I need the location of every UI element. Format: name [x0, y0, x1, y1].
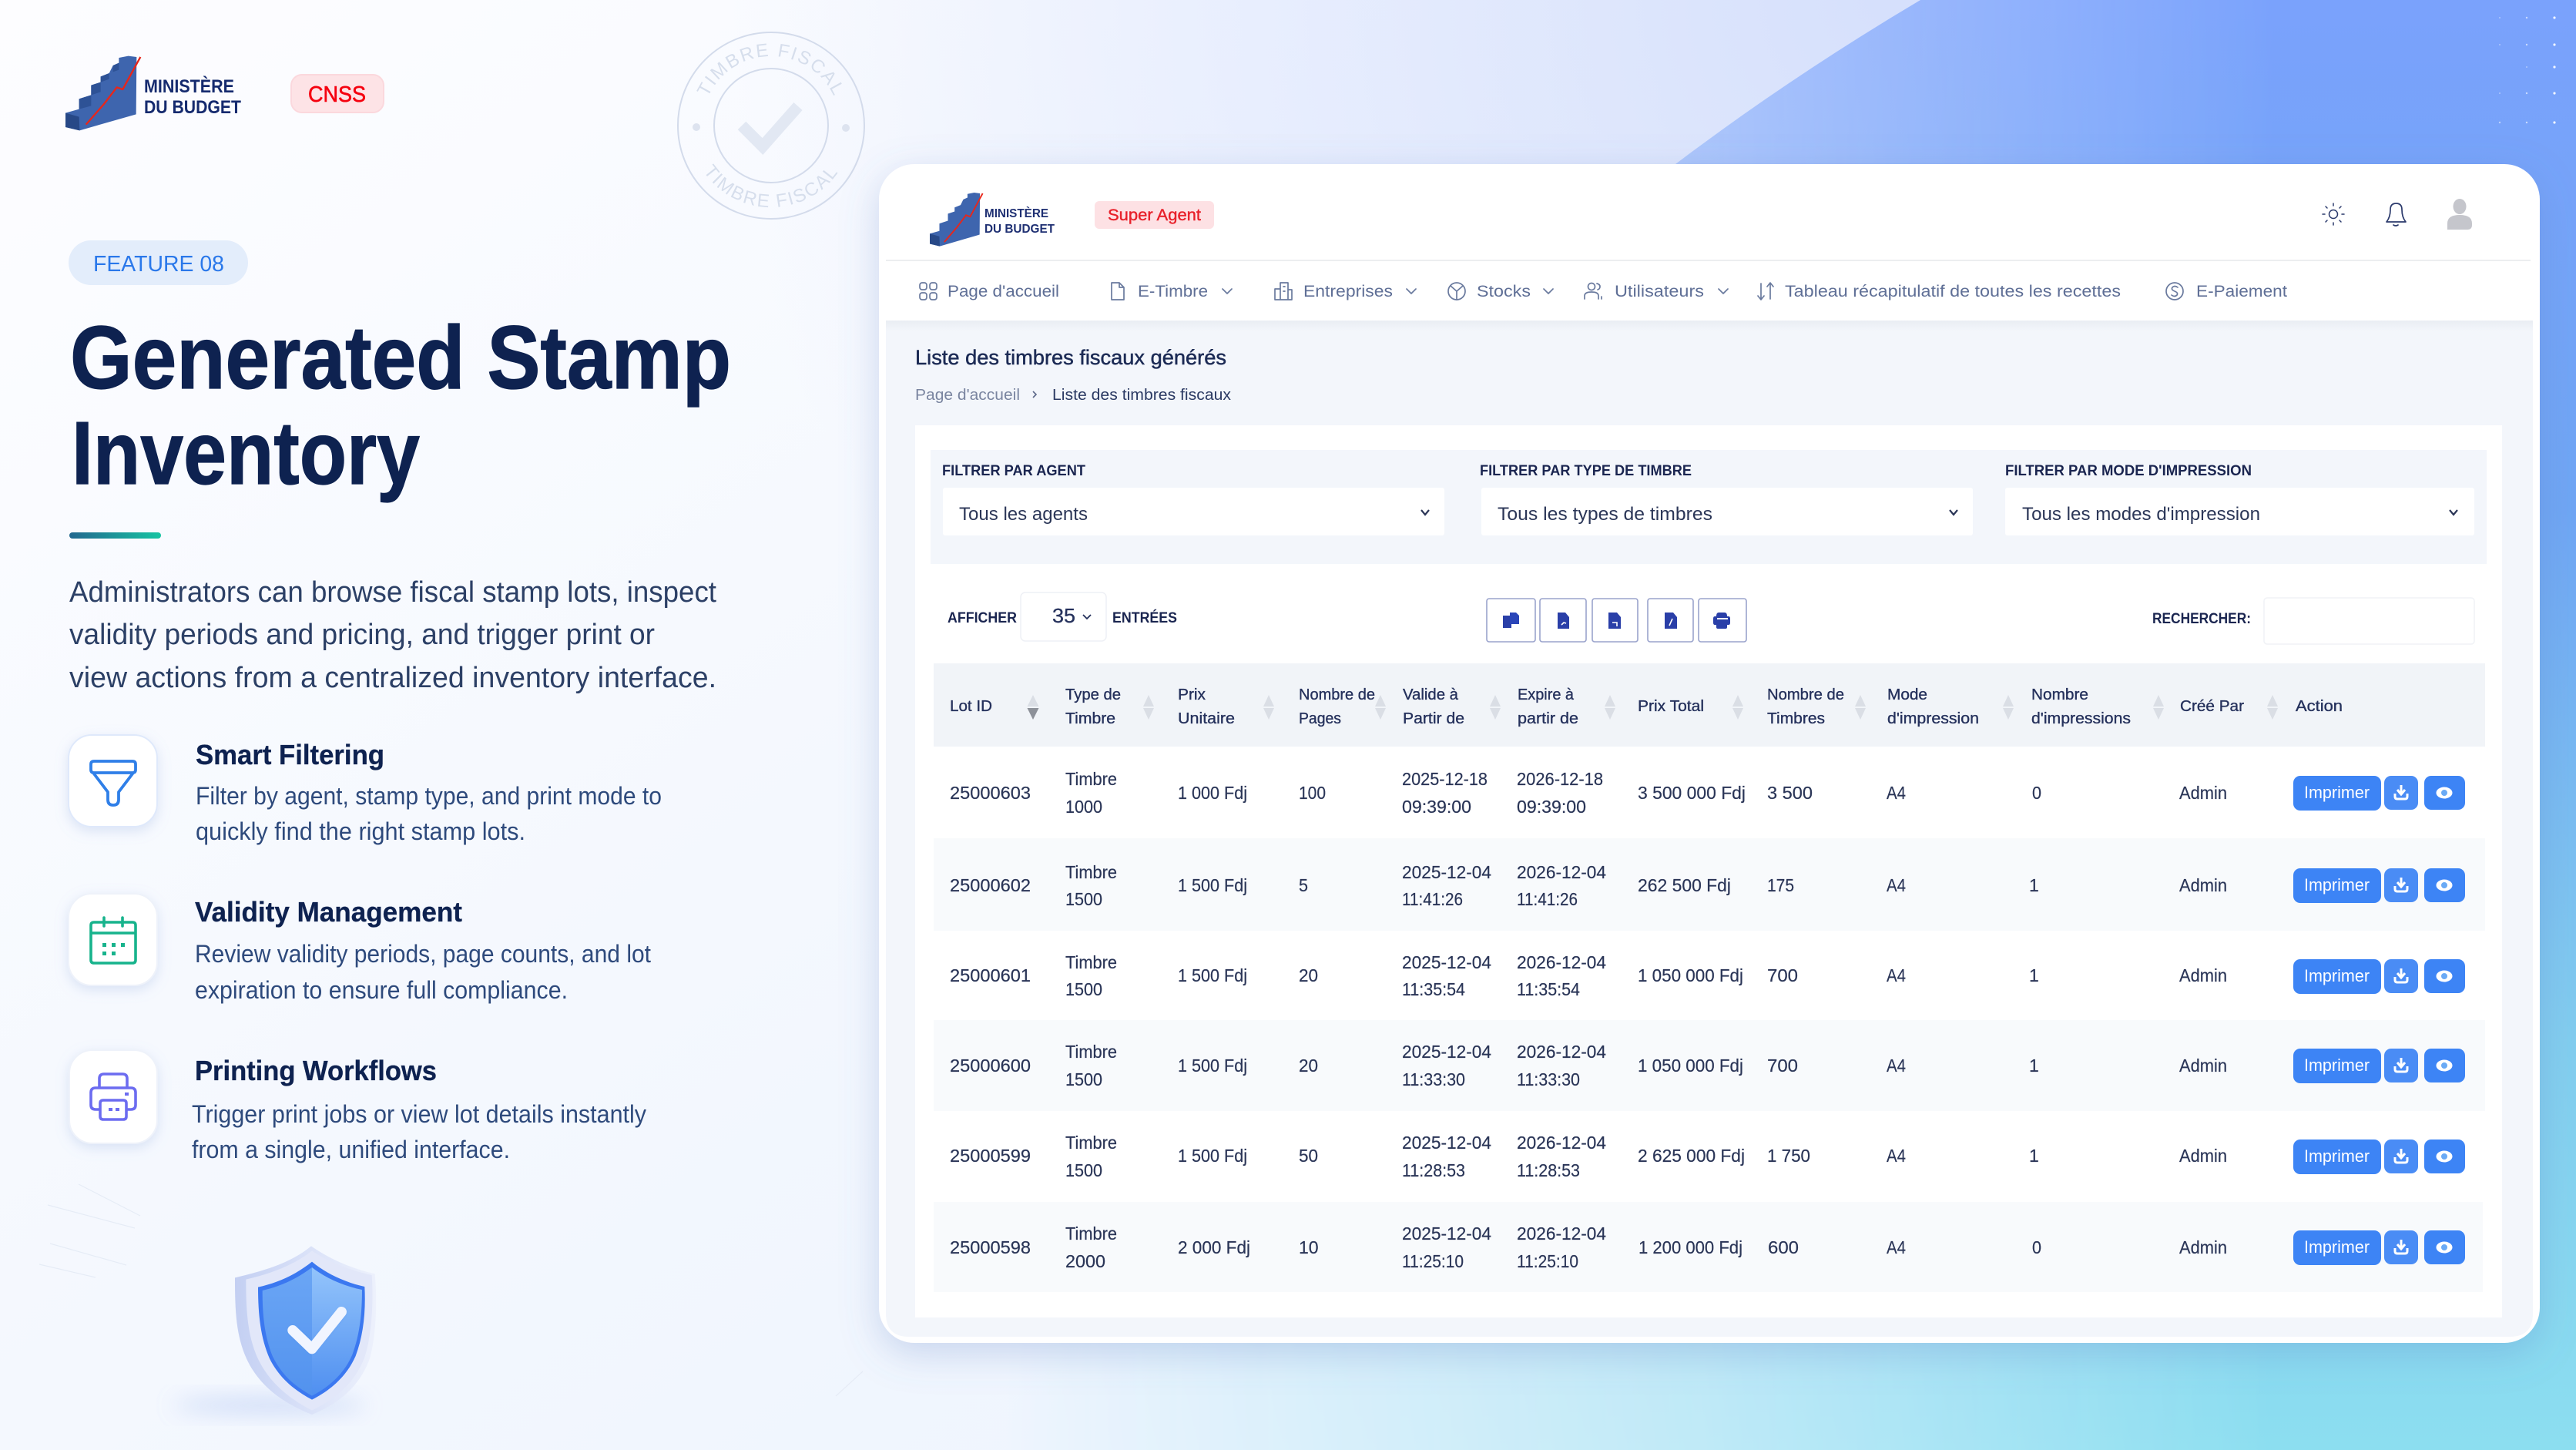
feature: validity management: expiration to ensure full compliance.	[195, 976, 568, 1004]
table row: lot 25000603: 1000	[1065, 797, 1102, 817]
table row: lot 25000603: 0	[2032, 783, 2041, 803]
table row: lot 25000603	[950, 769, 2465, 817]
navigation bar: Utilisateurs	[1615, 283, 1704, 300]
table row: lot 25000602: 2026-12-04	[1517, 862, 1606, 882]
feature: validity management	[69, 894, 651, 1004]
table row: lot 25000601: Timbre	[1065, 952, 1117, 972]
table row: lot 25000603: 2026-12-18	[1517, 769, 1603, 789]
table row: lot 25000603: 3 500	[1767, 783, 1813, 803]
table row: lot 25000603: 3 500 000 Fdj	[1638, 783, 1746, 803]
table row: lot 25000600: 11:33:30	[1402, 1069, 1465, 1089]
feature: smart filtering	[69, 735, 662, 845]
table row: lot 25000602: 5	[1299, 875, 1308, 895]
pill: feature 08	[69, 240, 248, 285]
table row: lot 25000602: 1	[2029, 875, 2039, 895]
table row: lot 25000598: 2 000 Fdj	[1178, 1237, 1250, 1257]
table controls: entries, export, search: RECHERCHER:	[2152, 611, 2251, 627]
table row: lot 25000602: 1 500 Fdj	[1178, 875, 1247, 895]
table header: Nombre de	[1767, 686, 1844, 703]
table row: lot 25000600: 1 500 Fdj	[1178, 1056, 1247, 1076]
table header: Nombre de	[1299, 686, 1375, 703]
table row: lot 25000602: Admin	[2179, 875, 2227, 895]
table row: lot 25000601: 2025-12-04	[1402, 952, 1491, 972]
table controls: entries, export, search: ENTRÉES	[1112, 609, 1177, 626]
table row: lot 25000599: Timbre	[1065, 1133, 1117, 1153]
table row: lot 25000599: 11:28:53	[1402, 1160, 1465, 1180]
table row: lot 25000599: Admin	[2179, 1146, 2227, 1166]
table row: lot 25000598: Timbre	[1065, 1223, 1117, 1244]
table row: lot 25000600: A4	[1887, 1056, 1906, 1076]
table row: lot 25000601: 700	[1767, 965, 1798, 985]
table row: lot 25000601: 20	[1299, 965, 1318, 985]
table row: lot 25000601: 1	[2029, 965, 2039, 985]
table row: lot 25000603: Timbre	[1065, 769, 1117, 789]
page heading and breadcrumb: Page d'accueil	[915, 387, 1020, 404]
page heading and breadcrumb	[915, 346, 1231, 404]
table row: lot 25000598: 11:25:10	[1402, 1251, 1464, 1271]
table row: lot 25000599: 11:28:53	[1517, 1160, 1580, 1180]
filter bar: Tous les modes d'impression	[2022, 504, 2260, 525]
navigation bar: E-Paiement	[2196, 283, 2287, 300]
table row: lot 25000602	[934, 838, 2485, 931]
row actions	[2293, 776, 2465, 811]
icon: notification bell	[2386, 203, 2406, 226]
table header: Type de	[1065, 686, 1121, 703]
table row: lot 25000602: 11:41:26	[1402, 889, 1463, 909]
row actions	[2293, 1140, 2465, 1174]
table row: lot 25000601: 1 050 000 Fdj	[1638, 965, 1743, 985]
table row: lot 25000599: 50	[1299, 1146, 1318, 1166]
table row: lot 25000599: 1500	[1065, 1160, 1102, 1180]
row actions: Imprimer	[2304, 1056, 2370, 1075]
table row: lot 25000603: 09:39:00	[1517, 797, 1586, 817]
table row: lot 25000599: 2025-12-04	[1402, 1133, 1491, 1153]
table row: lot 25000598: 25000598	[950, 1237, 1031, 1257]
table row: lot 25000601: 2026-12-04	[1517, 952, 1606, 972]
table header: Prix	[1178, 686, 1206, 703]
table header: Expire à	[1518, 686, 1575, 703]
icon: theme sun	[2323, 203, 2344, 225]
row actions: Imprimer	[2304, 966, 2370, 985]
table controls: entries, export, search	[948, 592, 2474, 644]
navigation bar: Page d'accueil	[948, 283, 1059, 300]
feature: validity management: Validity Management	[195, 896, 462, 928]
logo: Ministère du Budget: MINISTÈRE	[144, 76, 234, 97]
logo: Ministère du Budget: DU BUDGET	[144, 97, 241, 118]
table row: lot 25000599: 1 750	[1767, 1146, 1810, 1166]
icon: calendar	[69, 894, 157, 985]
navigation bar: Tableau récapitulatif de toutes les recettes	[1785, 283, 2121, 300]
table row: lot 25000598: 2026-12-04	[1517, 1223, 1606, 1244]
table row: lot 25000598: 1 200 000 Fdj	[1639, 1237, 1742, 1257]
table row: lot 25000600: 2026-12-04	[1517, 1042, 1606, 1062]
row actions: Imprimer	[2304, 1237, 2370, 1257]
table controls: entries, export, search: AFFICHER	[948, 610, 1017, 626]
table row: lot 25000601: 11:35:54	[1402, 979, 1465, 999]
table row: lot 25000598: 2025-12-04	[1402, 1223, 1491, 1244]
feature: smart filtering: Filter by agent, stamp type, and print mode to	[196, 782, 662, 810]
table row: lot 25000602: Timbre	[1065, 862, 1117, 882]
table row: lot 25000603: 2025-12-18	[1402, 769, 1488, 789]
table row: lot 25000600: 1 050 000 Fdj	[1638, 1056, 1743, 1076]
table row: lot 25000603: A4	[1887, 783, 1906, 803]
table row: lot 25000601: 11:35:54	[1517, 979, 1580, 999]
table row: lot 25000599: 1	[2029, 1146, 2039, 1166]
table header: Timbre	[1065, 710, 1115, 727]
feature: printing workflows	[69, 1050, 646, 1163]
page heading and breadcrumb: Liste des timbres fiscaux	[1052, 387, 1231, 404]
table row: lot 25000603: 100	[1299, 783, 1326, 803]
navigation bar: E-Timbre	[1138, 283, 1208, 300]
table row: lot 25000598: 10	[1299, 1237, 1319, 1257]
table row: lot 25000598	[934, 1202, 2483, 1292]
feature: smart filtering: Smart Filtering	[196, 739, 384, 770]
navigation bar	[920, 283, 2287, 300]
watermark: timbre fiscal stamp: TIMBRE FISCAL	[696, 43, 842, 96]
table row: lot 25000599: A4	[1887, 1146, 1906, 1166]
filter bar: Tous les agents	[959, 504, 1088, 525]
table row: lot 25000600: 1	[2029, 1056, 2039, 1076]
filter bar: FILTRER PAR AGENT	[942, 463, 1085, 479]
feature: validity management: Review validity periods, page counts, and lot	[195, 940, 651, 968]
table row: lot 25000601: 25000601	[950, 965, 1031, 985]
icon: printer	[69, 1050, 157, 1143]
table row: lot 25000600: 1500	[1065, 1069, 1102, 1089]
table row: lot 25000600: 20	[1299, 1056, 1318, 1076]
header: logo and role badge: MINISTÈRE	[984, 206, 1048, 220]
table header: Lot ID	[950, 698, 992, 715]
table row: lot 25000603: 09:39:00	[1402, 797, 1471, 817]
feature: printing workflows: Printing Workflows	[195, 1055, 437, 1086]
table header: d'impression	[1887, 710, 1979, 727]
header: logo and role badge: DU BUDGET	[984, 223, 1055, 236]
table row: lot 25000599: 1 500 Fdj	[1178, 1146, 1247, 1166]
table row: lot 25000601	[950, 952, 2465, 999]
table row: lot 25000600: Admin	[2179, 1056, 2227, 1076]
icon: user avatar	[2447, 199, 2472, 230]
table row: lot 25000601: A4	[1887, 965, 1906, 985]
row actions	[2293, 868, 2465, 903]
table row: lot 25000603: 25000603	[950, 783, 1031, 803]
table header: Valide à	[1403, 686, 1459, 703]
filter bar: FILTRER PAR TYPE DE TIMBRE	[1480, 463, 1692, 479]
table row: lot 25000603: 1 000 Fdj	[1178, 783, 1247, 803]
table row: lot 25000600: 2025-12-04	[1402, 1042, 1491, 1062]
table row: lot 25000601: Admin	[2179, 965, 2227, 985]
filter bar: Tous les types de timbres	[1498, 504, 1712, 525]
icon: funnel	[69, 735, 157, 827]
table header	[934, 663, 2485, 747]
table controls: entries, export, search: 35	[1052, 604, 1075, 627]
table row: lot 25000598: 0	[2032, 1237, 2041, 1257]
feature: printing workflows: from a single, unified interface.	[192, 1136, 510, 1163]
table row: lot 25000600: 25000600	[950, 1056, 1031, 1076]
navigation bar: Stocks	[1477, 283, 1531, 300]
table row: lot 25000598: A4	[1887, 1237, 1906, 1257]
row actions	[2293, 959, 2465, 994]
table row: lot 25000599: 25000599	[950, 1146, 1031, 1166]
row actions	[2293, 1230, 2465, 1265]
table header: Action	[2296, 698, 2343, 715]
title	[70, 307, 731, 503]
row actions	[2293, 1049, 2465, 1083]
header: logo and role badge	[930, 193, 1214, 247]
table row: lot 25000603: Admin	[2179, 783, 2227, 803]
table header: partir de	[1518, 710, 1578, 727]
badge: CNSS: CNSS	[308, 82, 366, 107]
intro paragraph	[69, 576, 716, 694]
table header: Unitaire	[1178, 710, 1235, 727]
logo: Ministère du Budget	[65, 56, 241, 130]
intro paragraph: validity periods and pricing, and trigger print or	[69, 619, 655, 651]
pill: feature 08: FEATURE 08	[93, 252, 224, 277]
table header: Prix Total	[1638, 698, 1704, 715]
feature: printing workflows: Trigger print jobs or view lot details instantly	[192, 1100, 646, 1128]
icon: 3d shield with check	[173, 1246, 376, 1415]
navigation bar: Entreprises	[1303, 283, 1393, 300]
table row: lot 25000600	[934, 1020, 2485, 1111]
row actions: Imprimer	[2304, 1146, 2370, 1166]
header: logo and role badge: Super Agent	[1108, 206, 1201, 224]
page heading and breadcrumb: Liste des timbres fiscaux générés	[915, 346, 1226, 369]
panel: application window	[879, 164, 2540, 1343]
table row: lot 25000598: 2000	[1065, 1251, 1105, 1271]
table header: Timbres	[1767, 710, 1825, 727]
table row: lot 25000602: A4	[1887, 875, 1906, 895]
badge: CNSS	[291, 75, 384, 112]
table row: lot 25000602: 175	[1767, 875, 1794, 895]
table row: lot 25000602: 262 500 Fdj	[1638, 875, 1731, 895]
table header: Nombre	[2031, 686, 2088, 703]
filter bar	[931, 450, 2487, 564]
accent bar	[69, 532, 161, 539]
table header: Créé Par	[2180, 698, 2244, 715]
table row: lot 25000602: 25000602	[950, 875, 1031, 895]
intro paragraph: view actions from a centralized inventory interface.	[69, 662, 716, 694]
table header: Mode	[1887, 686, 1927, 703]
table row: lot 25000600: Timbre	[1065, 1042, 1117, 1062]
table row: lot 25000599: 2 625 000 Fdj	[1638, 1146, 1745, 1166]
table header: d'impressions	[2031, 710, 2131, 727]
panel: inventory content	[915, 425, 2502, 1317]
watermark: timbre fiscal stamp: TIMBRE FISCAL	[706, 163, 838, 207]
row actions: Imprimer	[2304, 783, 2370, 802]
title: Generated Stamp	[70, 307, 731, 408]
table header: Pages	[1299, 710, 1341, 727]
table row: lot 25000602: 2025-12-04	[1402, 862, 1491, 882]
row actions: Imprimer	[2304, 875, 2370, 895]
table row: lot 25000598: 11:25:10	[1517, 1251, 1578, 1271]
table row: lot 25000602: 11:41:26	[1517, 889, 1578, 909]
table row: lot 25000601: 1500	[1065, 979, 1102, 999]
table row: lot 25000598: 600	[1768, 1237, 1799, 1257]
table row: lot 25000601: 1 500 Fdj	[1178, 965, 1247, 985]
table row: lot 25000602: 1500	[1065, 889, 1102, 909]
title: Inventory	[72, 403, 420, 503]
intro paragraph: Administrators can browse fiscal stamp lots, inspect	[69, 576, 716, 609]
table row: lot 25000599	[950, 1133, 2465, 1180]
table row: lot 25000600: 11:33:30	[1517, 1069, 1580, 1089]
feature: smart filtering: quickly find the right stamp lots.	[196, 817, 525, 845]
table row: lot 25000600: 700	[1767, 1056, 1798, 1076]
filter bar: FILTRER PAR MODE D'IMPRESSION	[2005, 463, 2252, 479]
watermark: timbre fiscal stamp	[677, 32, 865, 220]
table header: Partir de	[1403, 710, 1464, 727]
table row: lot 25000599: 2026-12-04	[1517, 1133, 1606, 1153]
table row: lot 25000598: Admin	[2179, 1237, 2227, 1257]
